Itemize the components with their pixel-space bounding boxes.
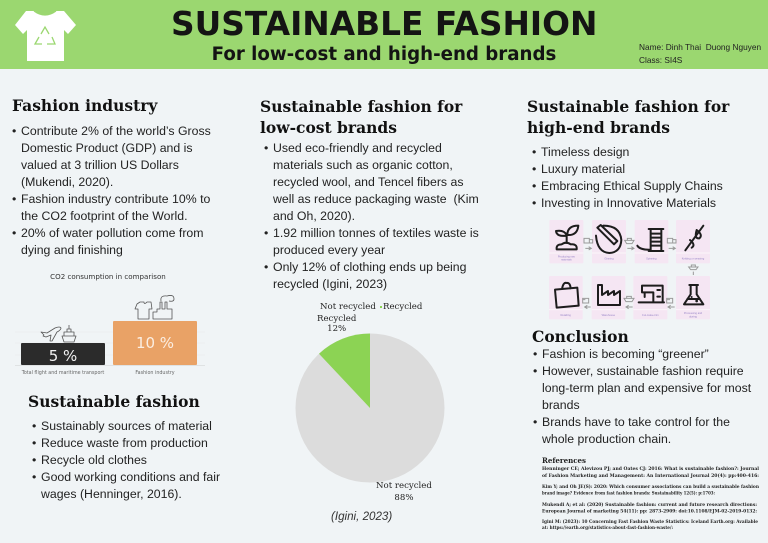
chart: CO2 comparison bbox=[15, 272, 205, 376]
label: recycled 12% bbox=[317, 314, 356, 334]
label: recycled 12%: Recycled bbox=[317, 314, 356, 324]
references bbox=[542, 456, 759, 530]
label: not recycled 88%: 88% bbox=[394, 493, 414, 503]
low-cost bullets: recycled (Igini, 2023) bbox=[273, 277, 387, 291]
high-end bullets: Embracing Ethical Supply Chains bbox=[541, 179, 723, 193]
sustainable fashion bullets: Good working conditions and fair bbox=[41, 470, 220, 484]
fashion industry bullets: Contribute 2% of the world’s Gross bbox=[21, 124, 211, 138]
pie bbox=[296, 306, 444, 482]
icon: recycled t-shirt bbox=[15, 11, 76, 61]
chart: CO2 comparison: Total flight and maritime transport bbox=[21, 370, 104, 376]
panel: low-cost brands bbox=[260, 97, 479, 291]
heading: low-cost brands bbox=[260, 97, 462, 137]
author details: Name: Dinh Thai Duong Nguyen bbox=[639, 42, 761, 52]
low-cost bullets bbox=[264, 141, 479, 291]
panel: sustainable fashion bbox=[28, 392, 220, 501]
fashion industry bullets: valued at 3 trillion US Dollars bbox=[21, 158, 179, 172]
panel: high-end brands bbox=[527, 97, 730, 210]
heading: fashion industry: Fashion industry bbox=[12, 96, 157, 115]
high-end bullets: Luxury material bbox=[541, 162, 625, 176]
panel: conclusion bbox=[532, 327, 752, 446]
label: recycled 12%: 12% bbox=[327, 324, 346, 334]
low-cost bullets: produced every year bbox=[273, 243, 385, 257]
author details: Class: SI4S bbox=[639, 54, 682, 64]
diagram: production chain: Warehouse bbox=[602, 313, 616, 317]
fashion industry bullets: the CO2 footprint of the World. bbox=[21, 209, 188, 223]
diagram: production chain: Cut-make-trim bbox=[642, 313, 660, 317]
chart: recycled pie bbox=[296, 302, 444, 523]
chart: CO2 comparison: 10 % bbox=[136, 334, 174, 352]
conclusion bullets bbox=[534, 347, 752, 446]
references: brand image? Evidence from fast fashion brands: Sustainability 12(5): p:1703: bbox=[542, 490, 715, 496]
sustainable fashion bullets: Reduce waste from production bbox=[41, 436, 208, 450]
high-end bullets: Investing in Innovative Materials bbox=[541, 196, 716, 210]
heading: low-cost brands: low-cost brands bbox=[260, 118, 397, 137]
label: not recycled 88%: Not recycled bbox=[376, 481, 432, 491]
references: References bbox=[542, 456, 586, 465]
chart: CO2 comparison: CO2 consumption in comparison bbox=[50, 272, 166, 281]
conclusion bullets: long-term plan and expensive for most bbox=[542, 381, 751, 395]
conclusion bullets: brands bbox=[542, 398, 580, 412]
sustainable fashion bullets: Sustainably sources of material bbox=[41, 419, 212, 433]
header banner bbox=[0, 0, 768, 69]
pie legend: Not recycled bbox=[320, 302, 376, 312]
fashion industry bullets: dying and finishing bbox=[21, 243, 123, 257]
subtitle: For low-cost and high-end brands bbox=[212, 44, 556, 65]
diagram: production chain: Retailing bbox=[560, 313, 571, 317]
low-cost bullets: Used eco-friendly and recycled bbox=[273, 141, 442, 155]
sewing bbox=[639, 286, 664, 302]
heading: sustainable fashion: Sustainable fashion bbox=[28, 392, 200, 411]
high-end bullets: Timeless design bbox=[541, 145, 629, 159]
diagram: production chain: Spinning bbox=[646, 256, 657, 260]
chart: CO2 comparison: Fashion industry bbox=[135, 370, 175, 376]
fashion industry bullets: 20% of water pollution come from bbox=[21, 226, 204, 240]
author details bbox=[639, 42, 761, 64]
plant bbox=[556, 226, 578, 249]
chart: recycled pie: Recycled bbox=[383, 302, 422, 312]
heading: high-end brands bbox=[527, 97, 730, 137]
title: SUSTAINABLE FASHION bbox=[171, 5, 597, 43]
high-end bullets bbox=[532, 145, 723, 210]
low-cost bullets: well as reduce packaging waste (Kim bbox=[273, 192, 479, 206]
fashion industry bullets: Fashion industry contribute 10% to bbox=[21, 192, 210, 206]
low-cost bullets: 1.92 million tonnes of textiles waste is bbox=[273, 226, 479, 240]
diagram: production chain: dyeing bbox=[689, 314, 697, 318]
diagram: production chain: Ginning bbox=[604, 256, 614, 260]
diagram: production chain: Processing and bbox=[684, 311, 703, 315]
heading: low-cost brands: Sustainable fashion for bbox=[260, 97, 462, 116]
bag bbox=[555, 283, 579, 308]
conclusion bullets: Brands have to take control for the bbox=[542, 415, 730, 429]
conclusion bullets: whole production chain. bbox=[542, 432, 671, 446]
sustainable fashion bullets: wages (Henninger, 2016). bbox=[41, 487, 182, 501]
diagram: production chain: materials bbox=[561, 258, 572, 262]
diagram: production chain: Knitting or weaving bbox=[682, 256, 705, 260]
fashion industry bullets: (Mukendi, 2020). bbox=[21, 175, 113, 189]
diagram: production chain: Producing raw bbox=[558, 254, 575, 258]
factory bbox=[598, 285, 620, 305]
needle bbox=[685, 226, 703, 250]
fashion industry bullets: Domestic Product (GDP) and is bbox=[21, 141, 193, 155]
diagram: production chain bbox=[549, 220, 710, 320]
pie source: (Igini, 2023) bbox=[331, 510, 392, 523]
gin bbox=[596, 225, 621, 253]
low-cost bullets: materials such as organic cotton, bbox=[273, 158, 453, 172]
conclusion bullets: However, sustainable fashion require bbox=[542, 364, 744, 378]
low-cost bullets: and Oh, 2020). bbox=[273, 209, 355, 223]
fashion industry bullets bbox=[12, 124, 211, 257]
sustainable fashion bullets bbox=[32, 419, 220, 501]
spool bbox=[637, 229, 663, 251]
conclusion bullets: Fashion is becoming “greener” bbox=[542, 347, 709, 361]
low-cost bullets: Only 12% of clothing ends up being bbox=[273, 260, 466, 274]
heading: high-end brands: high-end brands bbox=[527, 118, 670, 137]
sustainable fashion bullets: Recycle old clothes bbox=[41, 453, 147, 467]
heading: conclusion: Conclusion bbox=[532, 327, 629, 346]
flask bbox=[684, 285, 703, 304]
references: of Fashion Marketing and Management: An International Journal 20(4): pp:400-416: bbox=[542, 472, 759, 479]
heading: high-end brands: Sustainable fashion for bbox=[527, 97, 729, 116]
low-cost bullets: recycled wool, and Tencel fibers as bbox=[273, 175, 463, 189]
chart: CO2 comparison: 5 % bbox=[49, 347, 77, 365]
label: not recycled 88% bbox=[376, 481, 432, 503]
panel: fashion industry bbox=[12, 96, 211, 257]
